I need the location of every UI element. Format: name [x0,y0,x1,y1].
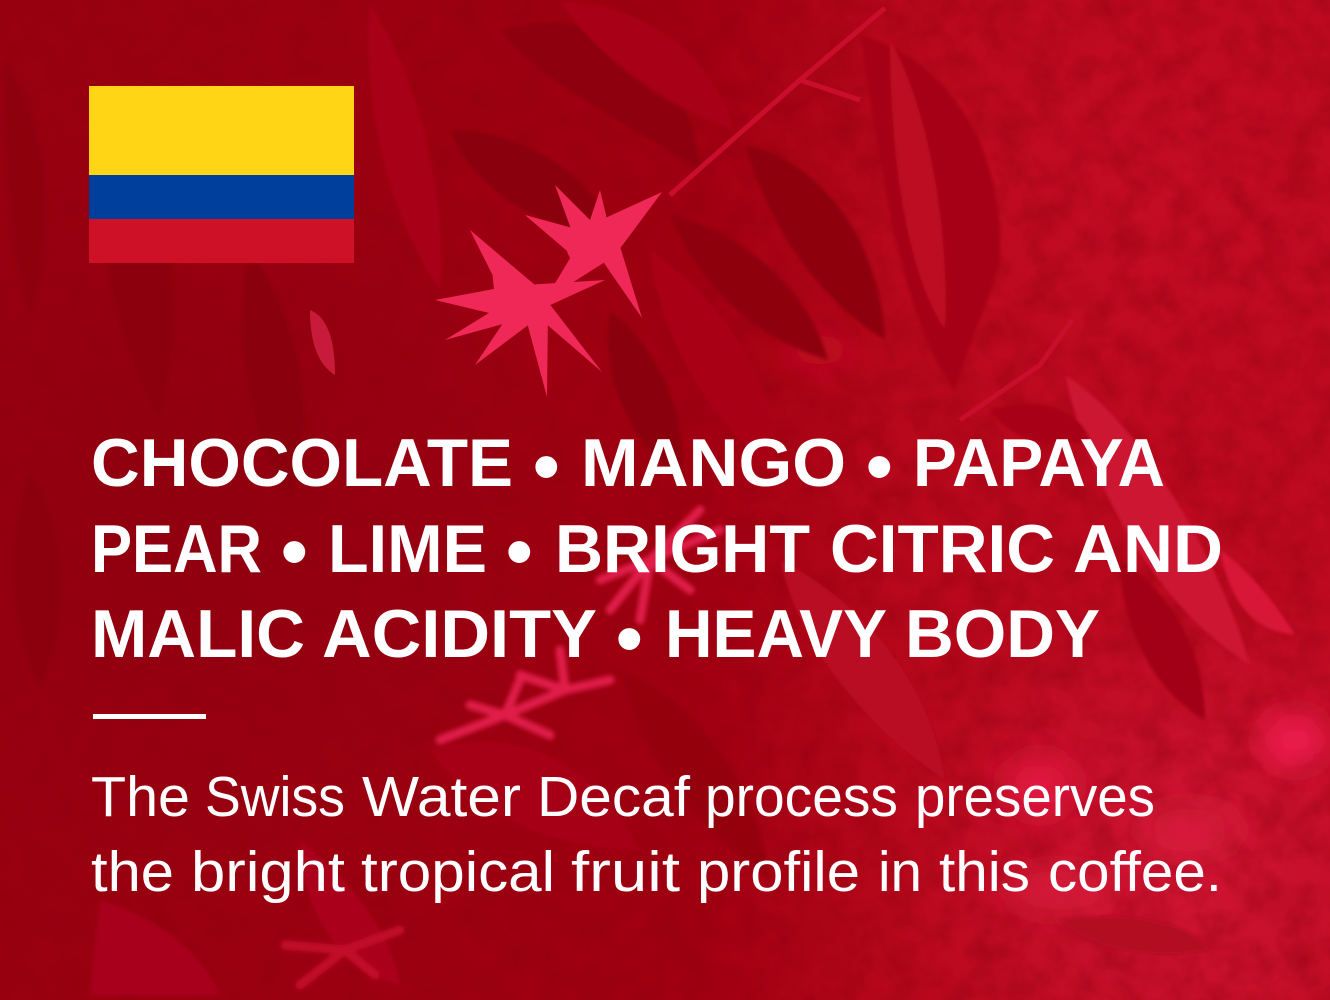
flavor notes heading: HEAVY [665,596,887,672]
flavor notes heading: PAPAYA [913,425,1165,501]
description text: this [939,840,1030,904]
flavor notes heading: CHOCOLATE [91,425,513,501]
description text: coffee. [1048,840,1222,904]
flavor notes heading: LIME [328,511,487,587]
description text: preserves [915,765,1155,829]
description text: Water [362,765,521,829]
flavor notes heading: MANGO [581,425,846,501]
branch [670,8,1072,420]
flavor notes heading: • [866,424,893,509]
upper flower cluster [435,185,662,397]
flavor notes heading: BRIGHT [555,511,810,587]
description text: process [705,765,898,829]
lower flower clusters [285,510,720,985]
description text: fruit [571,840,680,904]
description text: in [878,840,922,904]
divider rule [93,714,206,719]
flavor notes heading: AND [1073,511,1223,587]
description text: the [91,840,174,904]
flavor notes heading: • [281,509,308,594]
flavor notes heading: BODY [905,596,1100,672]
description text: Decaf [537,765,690,829]
description text: The [91,765,190,829]
description text: bright [191,840,345,904]
flavor notes heading: • [616,596,643,681]
flavor notes heading: MALIC [91,596,305,672]
flavor notes heading: CITRIC [830,511,1055,587]
flavor notes heading: • [533,424,560,509]
flavor notes heading: • [506,509,533,594]
description text: tropical [361,840,555,904]
flavor notes heading: PEAR [91,511,262,587]
flavor notes heading: ACIDITY [322,596,597,672]
description text: profile [697,840,860,904]
description text: Swiss [205,765,345,829]
